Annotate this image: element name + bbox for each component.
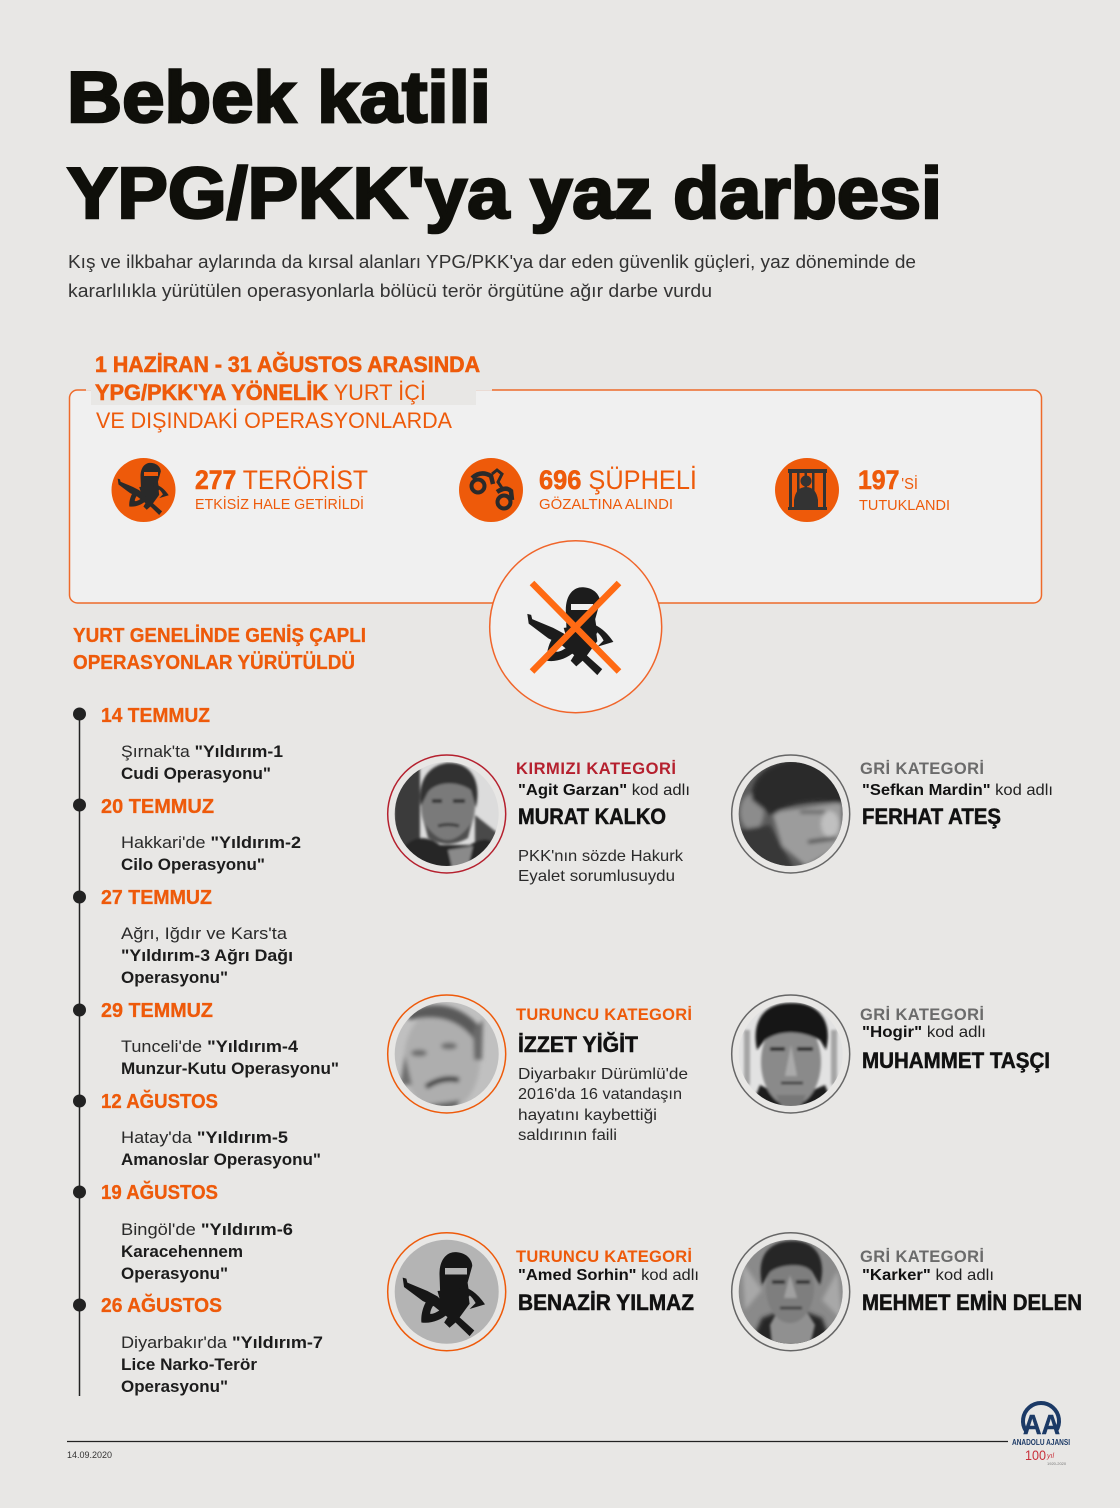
stat: terrorists neutralised: 277 TERÖRİST	[195, 464, 368, 495]
logo: Anadolu Ajansı: 100	[1025, 1447, 1046, 1463]
profile: Murat Kalko: "Agit Garzan" kod adlı	[518, 782, 690, 799]
profile: Murat Kalko: PKK'nın sözde Hakurk	[518, 848, 684, 865]
timeline item: 14 Temmuz	[73, 705, 283, 783]
stat: arrested	[775, 458, 950, 522]
profile: İzzet Yiğit: saldırının faili	[518, 1127, 617, 1144]
section heading: nationwide operations	[73, 624, 366, 674]
logo: Anadolu Ajansı	[1012, 1403, 1070, 1466]
timeline	[73, 705, 339, 1396]
profile: İzzet Yiğit: TURUNCU KATEGORİ	[516, 1006, 692, 1024]
stat: arrested: 197'Sİ	[858, 465, 918, 495]
logo: Anadolu Ajansı: yıl	[1046, 1453, 1054, 1460]
timeline item: 29 Temmuz: 29 TEMMUZ	[101, 1000, 213, 1022]
timeline item: 14 Temmuz: Şırnak'ta "Yıldırım-1	[121, 742, 283, 761]
profile: Murat Kalko	[388, 755, 690, 885]
timeline item: 19 Ağustos: Operasyonu"	[121, 1264, 228, 1283]
timeline item: 19 Ağustos	[73, 1180, 293, 1283]
profile: Muhammet Taşçı: GRİ KATEGORİ	[860, 1006, 984, 1024]
timeline item: 12 Ağustos	[73, 1089, 321, 1169]
section heading: nationwide operations: OPERASYONLAR YÜRÜTÜLDÜ	[73, 651, 355, 674]
timeline item: 14 Temmuz: 14 TEMMUZ	[101, 705, 210, 727]
timeline item: 26 Ağustos: 26 AĞUSTOS	[101, 1293, 222, 1317]
timeline item: 12 Ağustos: 12 AĞUSTOS	[101, 1089, 218, 1113]
title: Bebek katili	[67, 58, 491, 138]
stat: arrested: TUTUKLANDI	[859, 497, 950, 514]
timeline item: 20 Temmuz	[73, 796, 301, 874]
profile: Murat Kalko: Eyalet sorumlusuydu	[518, 868, 675, 885]
profile: Murat Kalko: KIRMIZI KATEGORİ	[516, 760, 676, 778]
stat: terrorists neutralised	[112, 458, 368, 522]
profile: Benazir Yılmaz	[388, 1233, 699, 1351]
profile: İzzet Yiğit: hayatını kaybettiği	[518, 1107, 657, 1124]
timeline item: 29 Temmuz	[73, 1000, 339, 1078]
panel heading	[95, 352, 480, 433]
profile: Benazir Yılmaz: BENAZİR YILMAZ	[518, 1290, 694, 1315]
icon: crossed-out terrorist	[490, 541, 662, 713]
title: YPG/PKK'ya yaz darbesi	[67, 154, 942, 234]
stat: suspects detained	[459, 458, 697, 522]
timeline item: 20 Temmuz: 20 TEMMUZ	[101, 796, 214, 818]
logo: Anadolu Ajansı: AA	[1023, 1409, 1060, 1440]
timeline item: 27 Temmuz	[73, 887, 293, 987]
timeline item: 29 Temmuz: Munzur-Kutu Operasyonu"	[121, 1059, 339, 1078]
profile: Ferhat Ateş: "Sefkan Mardin" kod adlı	[862, 782, 1053, 799]
panel heading: VE DIŞINDAKİ OPERASYONLARDA	[96, 408, 452, 433]
profile: Muhammet Taşçı: "Hogir" kod adlı	[862, 1024, 986, 1041]
title	[67, 58, 942, 234]
profile: Mehmet Emin Delen: MEHMET EMİN DELEN	[862, 1290, 1082, 1315]
timeline item: 14 Temmuz: Cudi Operasyonu"	[121, 764, 271, 783]
logo: Anadolu Ajansı: ANADOLU AJANSI	[1012, 1437, 1070, 1447]
section heading: nationwide operations: YURT GENELİNDE GENİŞ ÇAPLI	[73, 624, 366, 647]
profile: İzzet Yiğit: Diyarbakır Dürümlü'de	[518, 1066, 688, 1083]
profile: İzzet Yiğit	[388, 995, 692, 1144]
panel: operation totals	[70, 352, 1042, 603]
stat: suspects detained: 696 ŞÜPHELİ	[539, 464, 697, 495]
profile: Murat Kalko: MURAT KALKO	[518, 804, 666, 829]
stat: terrorists neutralised: ETKİSİZ HALE GETİRİLDİ	[195, 495, 364, 513]
profile: İzzet Yiğit: 2016'da 16 vatandaşın	[518, 1086, 682, 1103]
timeline item: 20 Temmuz: Hakkari'de "Yıldırım-2	[121, 833, 301, 852]
timeline item: 27 Temmuz: 27 TEMMUZ	[101, 887, 212, 909]
timeline item: 26 Ağustos: Lice Narko-Terör	[121, 1355, 257, 1374]
timeline item: 19 Ağustos: 19 AĞUSTOS	[101, 1180, 218, 1204]
subtitle: kararlılıkla yürütülen operasyonlarla bölücü terör örgütüne ağır darbe vurdu	[68, 281, 712, 301]
timeline item: 19 Ağustos: Bingöl'de "Yıldırım-6	[121, 1220, 293, 1239]
logo: Anadolu Ajansı: 1920-2020	[1047, 1461, 1067, 1466]
profile: Ferhat Ateş: GRİ KATEGORİ	[860, 760, 984, 778]
timeline item: 12 Ağustos: Hatay'da "Yıldırım-5	[121, 1128, 288, 1147]
timeline item: 27 Temmuz: Operasyonu"	[121, 968, 228, 987]
panel heading: 1 HAZİRAN - 31 AĞUSTOS ARASINDA	[95, 352, 480, 377]
panel heading: YPG/PKK'YA YÖNELİK YURT İÇİ	[95, 380, 426, 405]
timeline item: 12 Ağustos: Amanoslar Operasyonu"	[121, 1150, 321, 1169]
timeline item: 20 Temmuz: Cilo Operasyonu"	[121, 855, 265, 874]
timeline item: 26 Ağustos: Diyarbakır'da "Yıldırım-7	[121, 1333, 323, 1352]
timeline item: 26 Ağustos: Operasyonu"	[121, 1377, 228, 1396]
profile: Benazir Yılmaz: TURUNCU KATEGORİ	[516, 1248, 692, 1266]
timeline item: 19 Ağustos: Karacehennem	[121, 1242, 243, 1261]
timeline item: 27 Temmuz: Ağrı, Iğdır ve Kars'ta	[121, 924, 288, 943]
subtitle	[68, 252, 916, 301]
profile: Muhammet Taşçı: MUHAMMET TAŞÇI	[862, 1048, 1050, 1073]
timeline item: 27 Temmuz: "Yıldırım-3 Ağrı Dağı	[121, 946, 293, 965]
profile: Ferhat Ateş	[732, 755, 1053, 873]
profile: Muhammet Taşçı	[732, 995, 1050, 1113]
footer rule and date: 14.09.2020	[67, 1450, 112, 1460]
profile: Benazir Yılmaz: "Amed Sorhin" kod adlı	[518, 1267, 699, 1284]
profile: Ferhat Ateş: FERHAT ATEŞ	[862, 804, 1001, 829]
timeline item: 29 Temmuz: Tunceli'de "Yıldırım-4	[121, 1037, 299, 1056]
stat: suspects detained: GÖZALTINA ALINDI	[539, 495, 673, 513]
profile: Mehmet Emin Delen: GRİ KATEGORİ	[860, 1248, 984, 1266]
timeline item: 26 Ağustos	[73, 1293, 323, 1396]
profile: İzzet Yiğit: İZZET YİĞİT	[518, 1032, 639, 1057]
profile: Mehmet Emin Delen	[732, 1233, 1082, 1351]
subtitle: Kış ve ilkbahar aylarında da kırsal alanları YPG/PKK'ya dar eden güvenlik güçleri, yaz döneminde de	[68, 252, 916, 272]
profile: Mehmet Emin Delen: "Karker" kod adlı	[862, 1267, 994, 1284]
